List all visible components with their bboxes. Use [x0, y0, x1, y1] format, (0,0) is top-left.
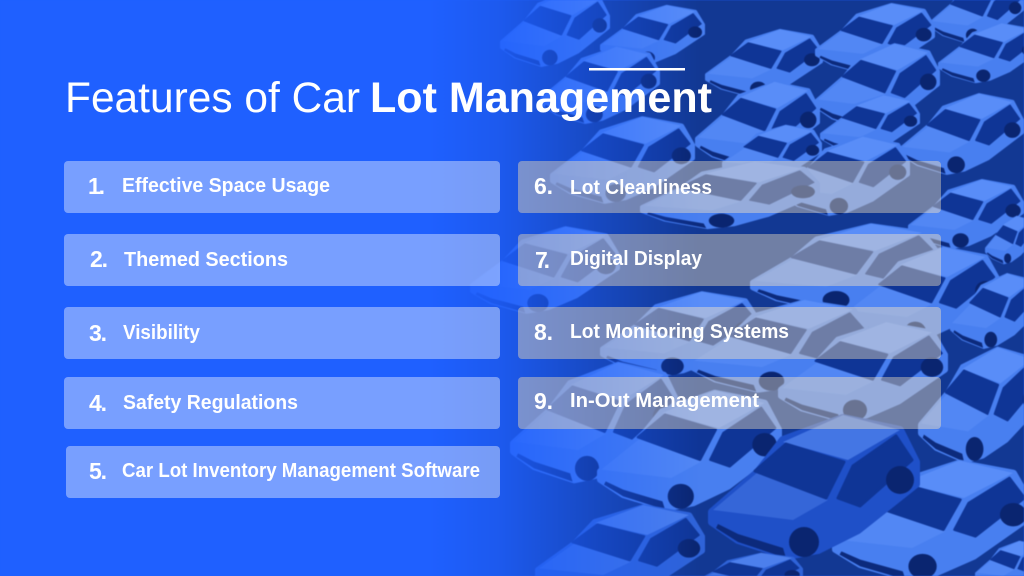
panel: item 2: 2. — [90, 246, 108, 272]
panel: item 6: 6. — [534, 173, 553, 199]
panel: item 9: In-Out Management — [570, 390, 759, 412]
panel: item 4: Safety Regulations — [123, 392, 298, 414]
panel: item 1 — [64, 161, 500, 213]
title text: Features of Car — [65, 74, 360, 122]
panel: item 8: Lot Monitoring Systems — [570, 321, 789, 343]
panel: item 1: Effective Space Usage — [122, 175, 330, 197]
panel: item 6: Lot Cleanliness — [570, 177, 712, 199]
blue foreground car — [712, 415, 916, 558]
panel: item 3: Visibility — [123, 322, 201, 344]
panel: item 6 — [518, 161, 941, 213]
left blue fade — [430, 0, 700, 576]
panel: item 7 — [518, 234, 941, 286]
panel: item 7: Digital Display — [570, 248, 703, 270]
panel: item 5: 5. — [89, 458, 107, 484]
dark foreground car — [538, 505, 801, 576]
title text — [65, 74, 712, 122]
title — [65, 68, 712, 122]
panel: item 2: Themed Sections — [124, 249, 288, 271]
panel: item 9: 9. — [534, 388, 553, 414]
panel: item 7: 7. — [535, 247, 550, 273]
panel: item 4: 4. — [89, 390, 107, 416]
panel: item 8: 8. — [534, 319, 553, 345]
title text: Lot Management — [370, 74, 712, 122]
panel: item 8 — [518, 307, 941, 359]
panel: item 2 — [64, 234, 500, 286]
panel: item 1: 1. — [88, 173, 105, 199]
panel: item 4 — [64, 377, 500, 429]
panel: item 5 — [66, 446, 500, 498]
group of parked cars — [473, 0, 1024, 576]
panel: item 5: Car Lot Inventory Management Software — [122, 460, 480, 482]
panel: item 3 — [64, 307, 500, 359]
accent line — [589, 68, 685, 70]
panel: item 3: 3. — [89, 320, 107, 346]
panel: item 9 — [518, 377, 941, 429]
